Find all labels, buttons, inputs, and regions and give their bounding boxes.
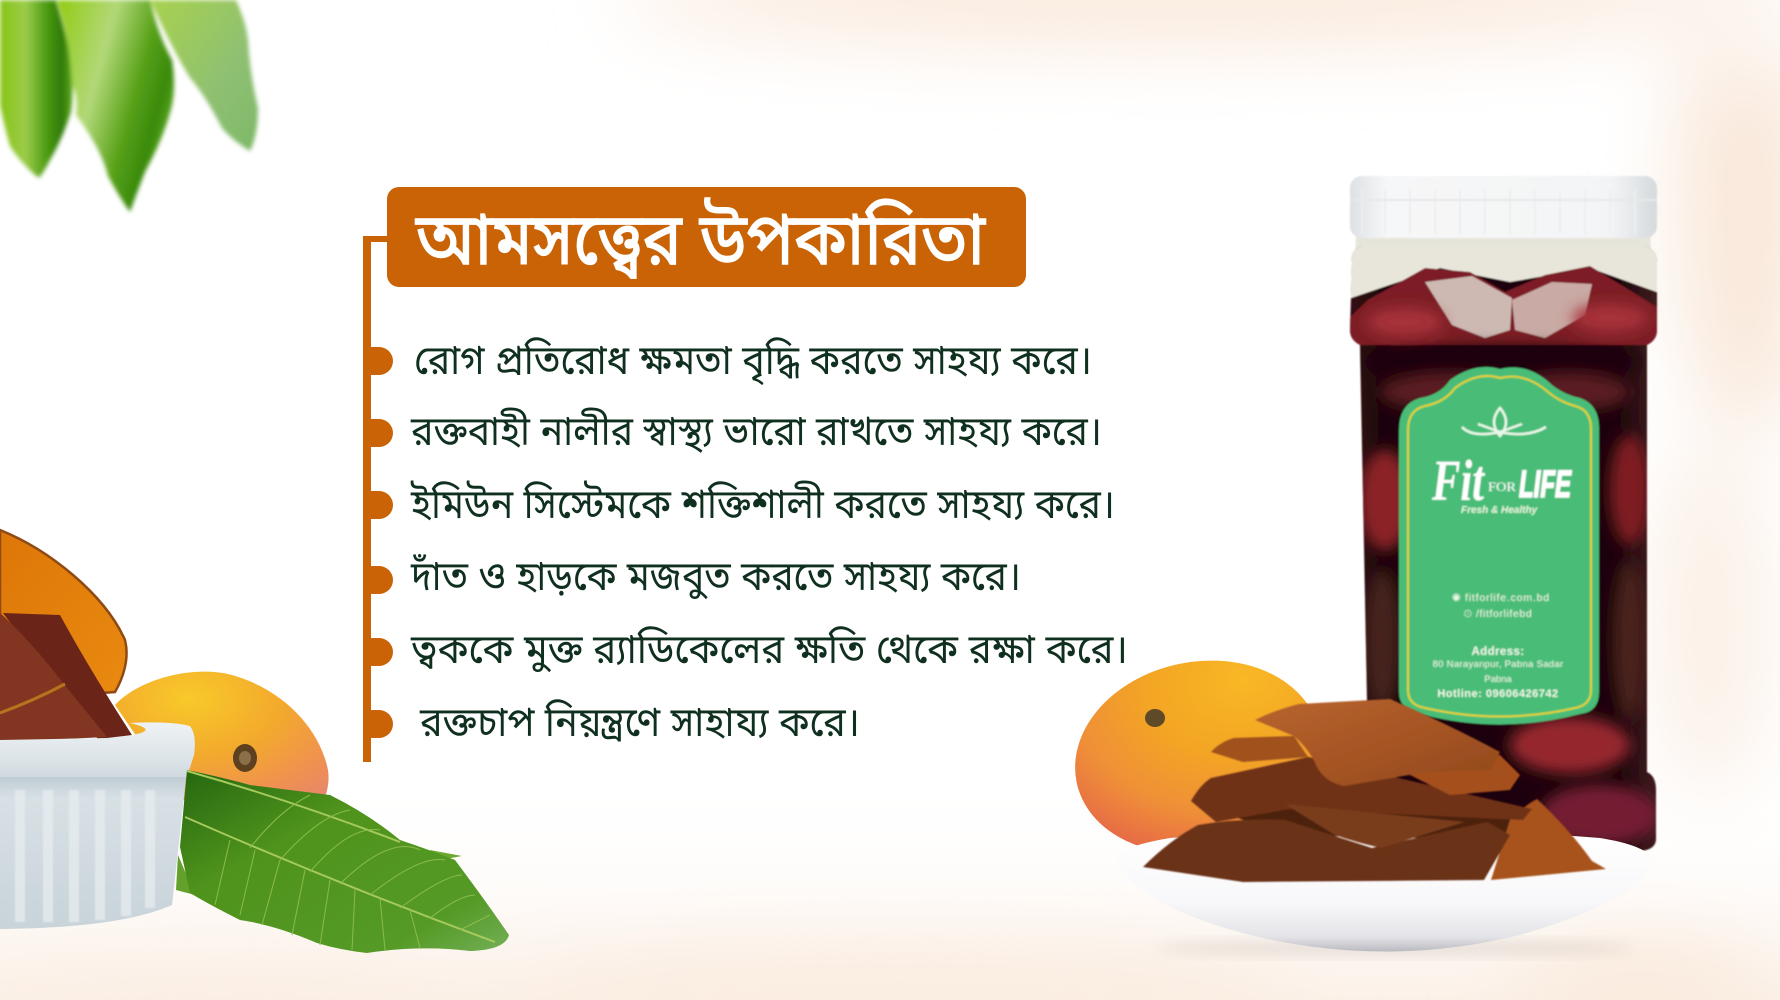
right mango [1057,638,1339,876]
label contacts: Address: [1471,646,1525,658]
orange mango slice [0,530,127,700]
benefit 5: ত্বককে মুক্ত র‍্যাডিকেলের ক্ষতি থেকে রক্ষা করে। [410,625,1128,673]
mango stem spot [233,744,257,772]
bullet 5 [370,638,393,666]
label brand: Fresh & Healthy [1461,505,1538,516]
mango stem spot [1145,709,1165,727]
product label [1399,367,1599,724]
benefit 3: ইমিউন সিস্টেমকে শক্তিশালী করতে সাহয্য করে। [410,480,1115,527]
top-left mango leaves [0,0,258,212]
label ornament [1462,408,1546,436]
white plate [1115,829,1654,952]
jar lid [1350,176,1657,238]
benefits timeline rail [363,236,393,762]
jar fruit contents [1345,266,1665,845]
bullet 6 [370,710,393,738]
label brand [1431,448,1572,516]
label contacts: 80 Narayanpur, Pabna Sadar [1433,659,1563,670]
title text: আমসত্ত্বের উপকারিতা [415,198,986,280]
bullet 4 [370,566,393,594]
jar headspace [1345,246,1665,300]
white ramekin bowl [0,722,195,929]
label brand: Fit [1431,448,1485,513]
jar glass neck [1355,232,1652,262]
left mango [115,672,329,805]
benefit 4: দাঁত ও হাড়কে মজবুত করতে সাহয্য করে। [410,553,1021,600]
label contacts: Pabna [1484,674,1512,685]
label contacts: ◉ fitforlife.com.bd [1452,592,1550,604]
bullet 3 [370,491,393,519]
benefit 6: রক্তচাপ নিয়ন্ত্রণে সাহায্য করে। [419,698,860,745]
label contacts: ⊙ /fitforlifebd [1464,608,1532,620]
bullet 2 [370,419,393,447]
mango leaf on table [176,770,509,953]
label brand: FOR [1488,479,1516,494]
benefit 2: রক্তবাহী নালীর স্বাস্থ্য ভারো রাখতে সাহয্য করে। [410,407,1102,454]
label contacts: Hotline: 09606426742 [1437,688,1559,700]
plate shadow [1155,940,1635,956]
title banner [387,187,1026,287]
benefit 1: রোগ প্রতিরোধ ক্ষমতা বৃদ্ধি করতে সাহয্য করে। [414,336,1092,386]
benefits list [410,336,1128,745]
bullet 1 [370,347,393,375]
mango leather stack [1143,699,1606,882]
product jar [1340,176,1670,860]
dark mango pieces [0,613,132,742]
label contacts [1433,592,1563,700]
label brand: LIFE [1519,464,1572,506]
